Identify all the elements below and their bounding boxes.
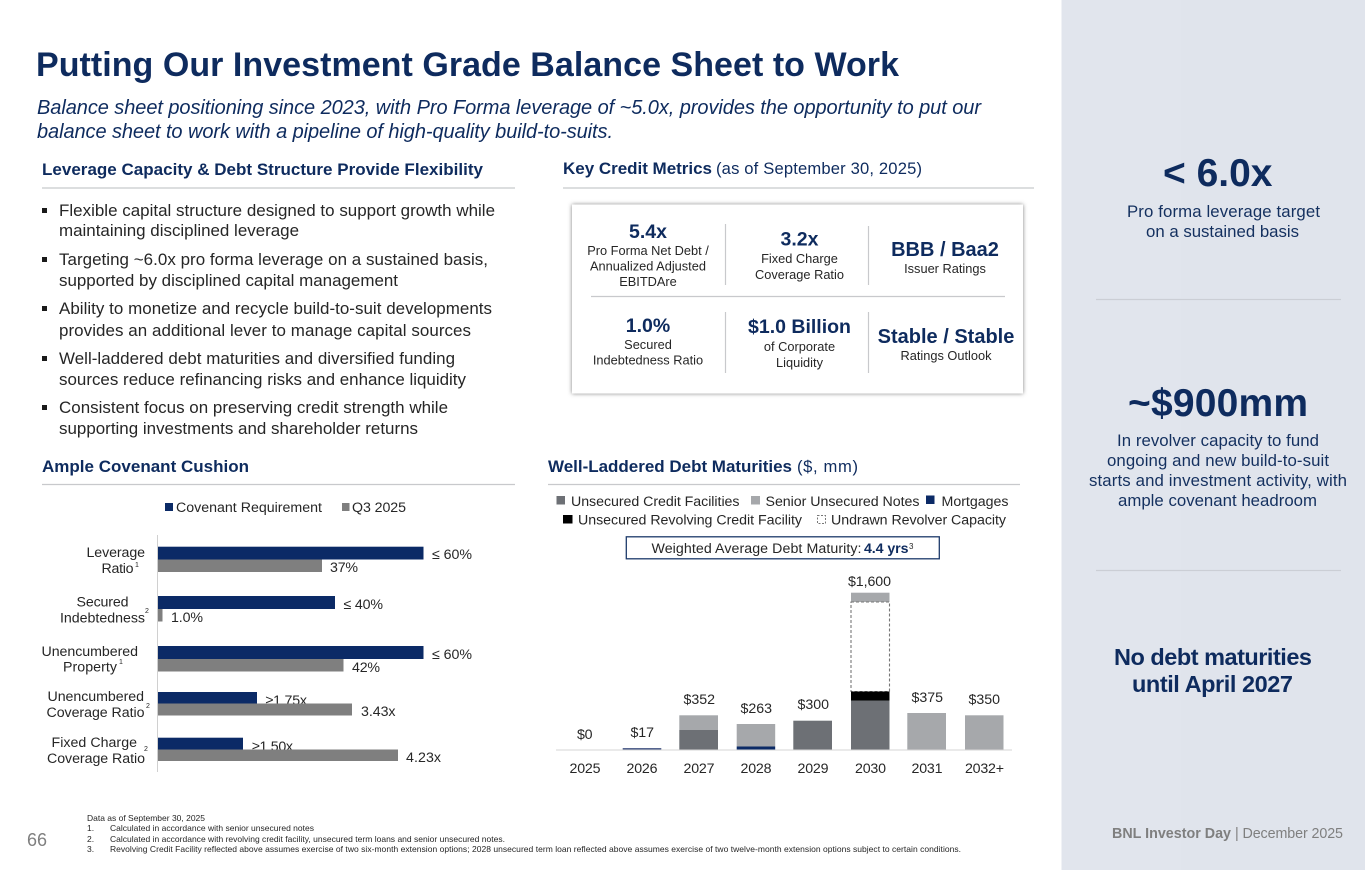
value labels: maturities: $17 (630, 725, 654, 741)
category labels: covenant: Secured (76, 594, 128, 610)
chart legend: maturities: Mortgages (942, 494, 1008, 510)
chart legend: covenant: Q3 2025 (352, 500, 406, 516)
callout: weighted average debt maturity: 4.4 yrs (864, 541, 909, 557)
footer label: | December 2025 (1235, 826, 1343, 842)
axis labels: years (570, 761, 1004, 777)
stat: leverage target: < 6.0x (1163, 152, 1273, 195)
stat: no debt maturities: No debt maturities (1114, 644, 1312, 670)
axis labels: years: 2029 (798, 761, 829, 777)
bars: covenant values: ≥1.75x (266, 693, 307, 709)
category labels: covenant: 1 (135, 562, 139, 569)
category labels: covenant: Ratio (102, 561, 134, 577)
category labels: covenant (42, 545, 150, 767)
panel: key credit metrics: Liquidity (776, 355, 824, 370)
value labels: covenant: 1.0% (171, 610, 203, 626)
heading: key credit metrics (563, 159, 1034, 188)
bullet list: leverage capacity: Consistent focus on preserving credit strength while (59, 398, 448, 417)
axis labels: years: 2032+ (965, 761, 1004, 777)
stat: revolver capacity: In revolver capacity to fund (1117, 431, 1319, 450)
stat: no debt maturities: until April 2027 (1132, 671, 1293, 697)
category labels: covenant: 2 (145, 608, 149, 615)
stat: revolver capacity: ample covenant headroom (1118, 491, 1317, 510)
heading: well-laddered debt maturities: ($, mm) (797, 457, 858, 476)
value labels: maturities: $352 (684, 692, 715, 708)
axis labels: years: 2030 (855, 761, 886, 777)
category labels: covenant: Coverage Ratio (47, 751, 145, 767)
axis labels: years: 2025 (570, 761, 601, 777)
bullet list: leverage capacity (42, 201, 495, 438)
bars: covenant values: ≥1.50x (252, 739, 293, 755)
heading: key credit metrics: (as of September 30, 2025) (716, 159, 922, 178)
footnotes (87, 813, 961, 854)
category labels: covenant: Indebtedness (60, 610, 145, 626)
panel: key credit metrics: BBB / Baa2 (891, 239, 999, 261)
panel: key credit metrics: EBITDAre (619, 274, 677, 289)
footnotes: 2. (87, 834, 94, 844)
bullet list: leverage capacity: supported by disciplined capital management (59, 271, 398, 290)
panel: key credit metrics: Secured (624, 337, 672, 352)
panel: key credit metrics: Fixed Charge (761, 251, 838, 266)
value labels: maturities: $300 (798, 697, 829, 713)
chart legend: covenant: Covenant Requirement (176, 500, 322, 516)
stat: revolver capacity: starts and investment activity, with (1089, 471, 1347, 490)
stat: revolver capacity: ~$900mm (1128, 382, 1308, 425)
subtitle: Balance sheet positioning since 2023, with Pro Forma leverage of ~5.0x, provides the opportunity to put our (37, 97, 982, 119)
category labels: covenant: 1 (119, 659, 123, 666)
value labels: maturities: $375 (912, 690, 943, 706)
value labels: covenant (171, 547, 472, 766)
title: Putting Our Investment Grade Balance Sheet to Work (36, 46, 899, 84)
chart legend: maturities: Unsecured Revolving Credit Facility (578, 512, 803, 528)
bars: covenant values (158, 547, 424, 761)
axis labels: years: 2026 (626, 761, 658, 777)
bullet list: leverage capacity: provides an additional lever to manage capital sources (59, 321, 471, 340)
category labels: covenant: Leverage (86, 545, 145, 561)
category labels: covenant: 2 (146, 703, 150, 710)
bullet list: leverage capacity: Well-laddered debt maturities and diversified funding (59, 349, 455, 368)
footnotes: Calculated in accordance with revolving credit facility, unsecured term loans and senior unsecured notes. (110, 834, 505, 844)
bullet list: leverage capacity: Flexible capital structure designed to support growth while (59, 201, 495, 220)
stat: leverage target (1127, 152, 1320, 241)
chart legend: maturities: Senior Unsecured Notes (766, 494, 920, 510)
panel: key credit metrics: Pro Forma Net Debt / (587, 243, 709, 258)
subtitle: balance sheet to work with a pipeline of high-quality build-to-suits. (37, 121, 613, 143)
heading: well-laddered debt maturities (548, 457, 1020, 484)
footnotes: Data as of September 30, 2025 (87, 813, 205, 823)
value labels: maturities: $1,600 (848, 574, 891, 590)
callout: weighted average debt maturity (626, 537, 939, 559)
panel: key credit metrics: Stable / Stable (878, 326, 1014, 348)
stat: revolver capacity (1089, 382, 1347, 510)
panel: key credit metrics: Indebtedness Ratio (593, 352, 703, 368)
value labels: maturities: $350 (968, 692, 1000, 708)
stat: no debt maturities (1114, 644, 1312, 697)
value labels: covenant: ≤ 60% (432, 547, 472, 563)
callout: weighted average debt maturity: 3 (909, 542, 914, 551)
heading: ample covenant cushion: Ample Covenant Cushion (42, 457, 249, 476)
subtitle (37, 97, 982, 143)
chart legend: covenant (165, 500, 406, 516)
heading: well-laddered debt maturities: Well-Laddered Debt Maturities (548, 457, 792, 476)
chart legend: maturities: Unsecured Credit Facilities (571, 494, 740, 510)
bar chart: covenant cushion (42, 500, 472, 772)
panel: key credit metrics: Ratings Outlook (900, 348, 992, 363)
footer label (1112, 826, 1343, 842)
axis labels: years: 2027 (684, 761, 715, 777)
category labels: covenant: Property (63, 660, 118, 676)
footnotes: 1. (87, 823, 94, 833)
panel: sidebar (1062, 0, 1365, 870)
footer label: BNL Investor Day (1112, 826, 1231, 842)
panel: key credit metrics: of Corporate (764, 339, 835, 354)
heading: leverage capacity: Leverage Capacity & Debt Structure Provide Flexibility (42, 160, 484, 179)
stat: leverage target: on a sustained basis (1146, 222, 1299, 241)
bullet list: leverage capacity: Targeting ~6.0x pro forma leverage on a sustained basis, (59, 250, 488, 269)
panel: key credit metrics (572, 204, 1023, 394)
axis labels: years: 2028 (740, 761, 772, 777)
value labels: maturities: $263 (740, 701, 772, 717)
value labels: covenant: 4.23x (406, 750, 441, 766)
stat: revolver capacity: ongoing and new build-to-suit (1107, 451, 1329, 470)
stacked bar chart: debt maturities (556, 494, 1012, 777)
value labels: covenant: 3.43x (361, 704, 396, 720)
category labels: covenant: Fixed Charge (52, 735, 137, 751)
footnotes: 3. (87, 844, 94, 854)
panel: key credit metrics: 5.4x (629, 221, 667, 243)
stat: leverage target: Pro forma leverage target (1127, 202, 1320, 221)
axis labels: years: 2031 (912, 761, 943, 777)
callout: weighted average debt maturity: Weighted Average Debt Maturity: (652, 541, 862, 557)
category labels: covenant: Unencumbered (42, 644, 138, 660)
panel: key credit metrics: 3.2x (781, 228, 819, 250)
bullet list: leverage capacity: supporting investments and shareholder returns (59, 419, 418, 438)
value labels: covenant: ≤ 60% (432, 647, 472, 663)
value labels: covenant: ≤ 40% (344, 597, 383, 613)
footnotes: Calculated in accordance with senior unsecured notes (110, 823, 314, 833)
chart legend: maturities: Undrawn Revolver Capacity (831, 512, 1007, 528)
value labels: covenant: 37% (330, 560, 358, 576)
panel: key credit metrics: Coverage Ratio (755, 267, 844, 282)
footnotes: Revolving Credit Facility reflected above assumes exercise of two six-month extension options; 2028 unsecured term loan reflected above assumes exercise of two twelve-month extension options subject to certain conditions. (110, 844, 961, 854)
panel: key credit metrics: Issuer Ratings (904, 261, 986, 276)
value labels: maturities (577, 574, 1000, 743)
value labels: maturities: $0 (577, 727, 593, 743)
bars: maturities (623, 593, 1004, 750)
bullet list: leverage capacity: Ability to monetize and recycle build-to-suit developments (59, 299, 492, 318)
value labels: covenant: 42% (352, 660, 380, 676)
bullet list: leverage capacity: sources reduce refinancing risks and enhance liquidity (59, 370, 467, 389)
category labels: covenant: 2 (144, 746, 148, 753)
panel: key credit metrics: 1.0% (626, 315, 670, 337)
heading: key credit metrics: Key Credit Metrics (563, 159, 712, 178)
chart legend: maturities (556, 494, 1008, 528)
panel: key credit metrics: $1.0 Billion (748, 316, 851, 338)
page number: 66 (27, 830, 47, 850)
category labels: covenant: Unencumbered (48, 689, 144, 705)
panel: key credit metrics: Annualized Adjusted (590, 258, 706, 274)
bullet list: leverage capacity: maintaining disciplined leverage (59, 221, 299, 240)
category labels: covenant: Coverage Ratio (46, 705, 145, 721)
